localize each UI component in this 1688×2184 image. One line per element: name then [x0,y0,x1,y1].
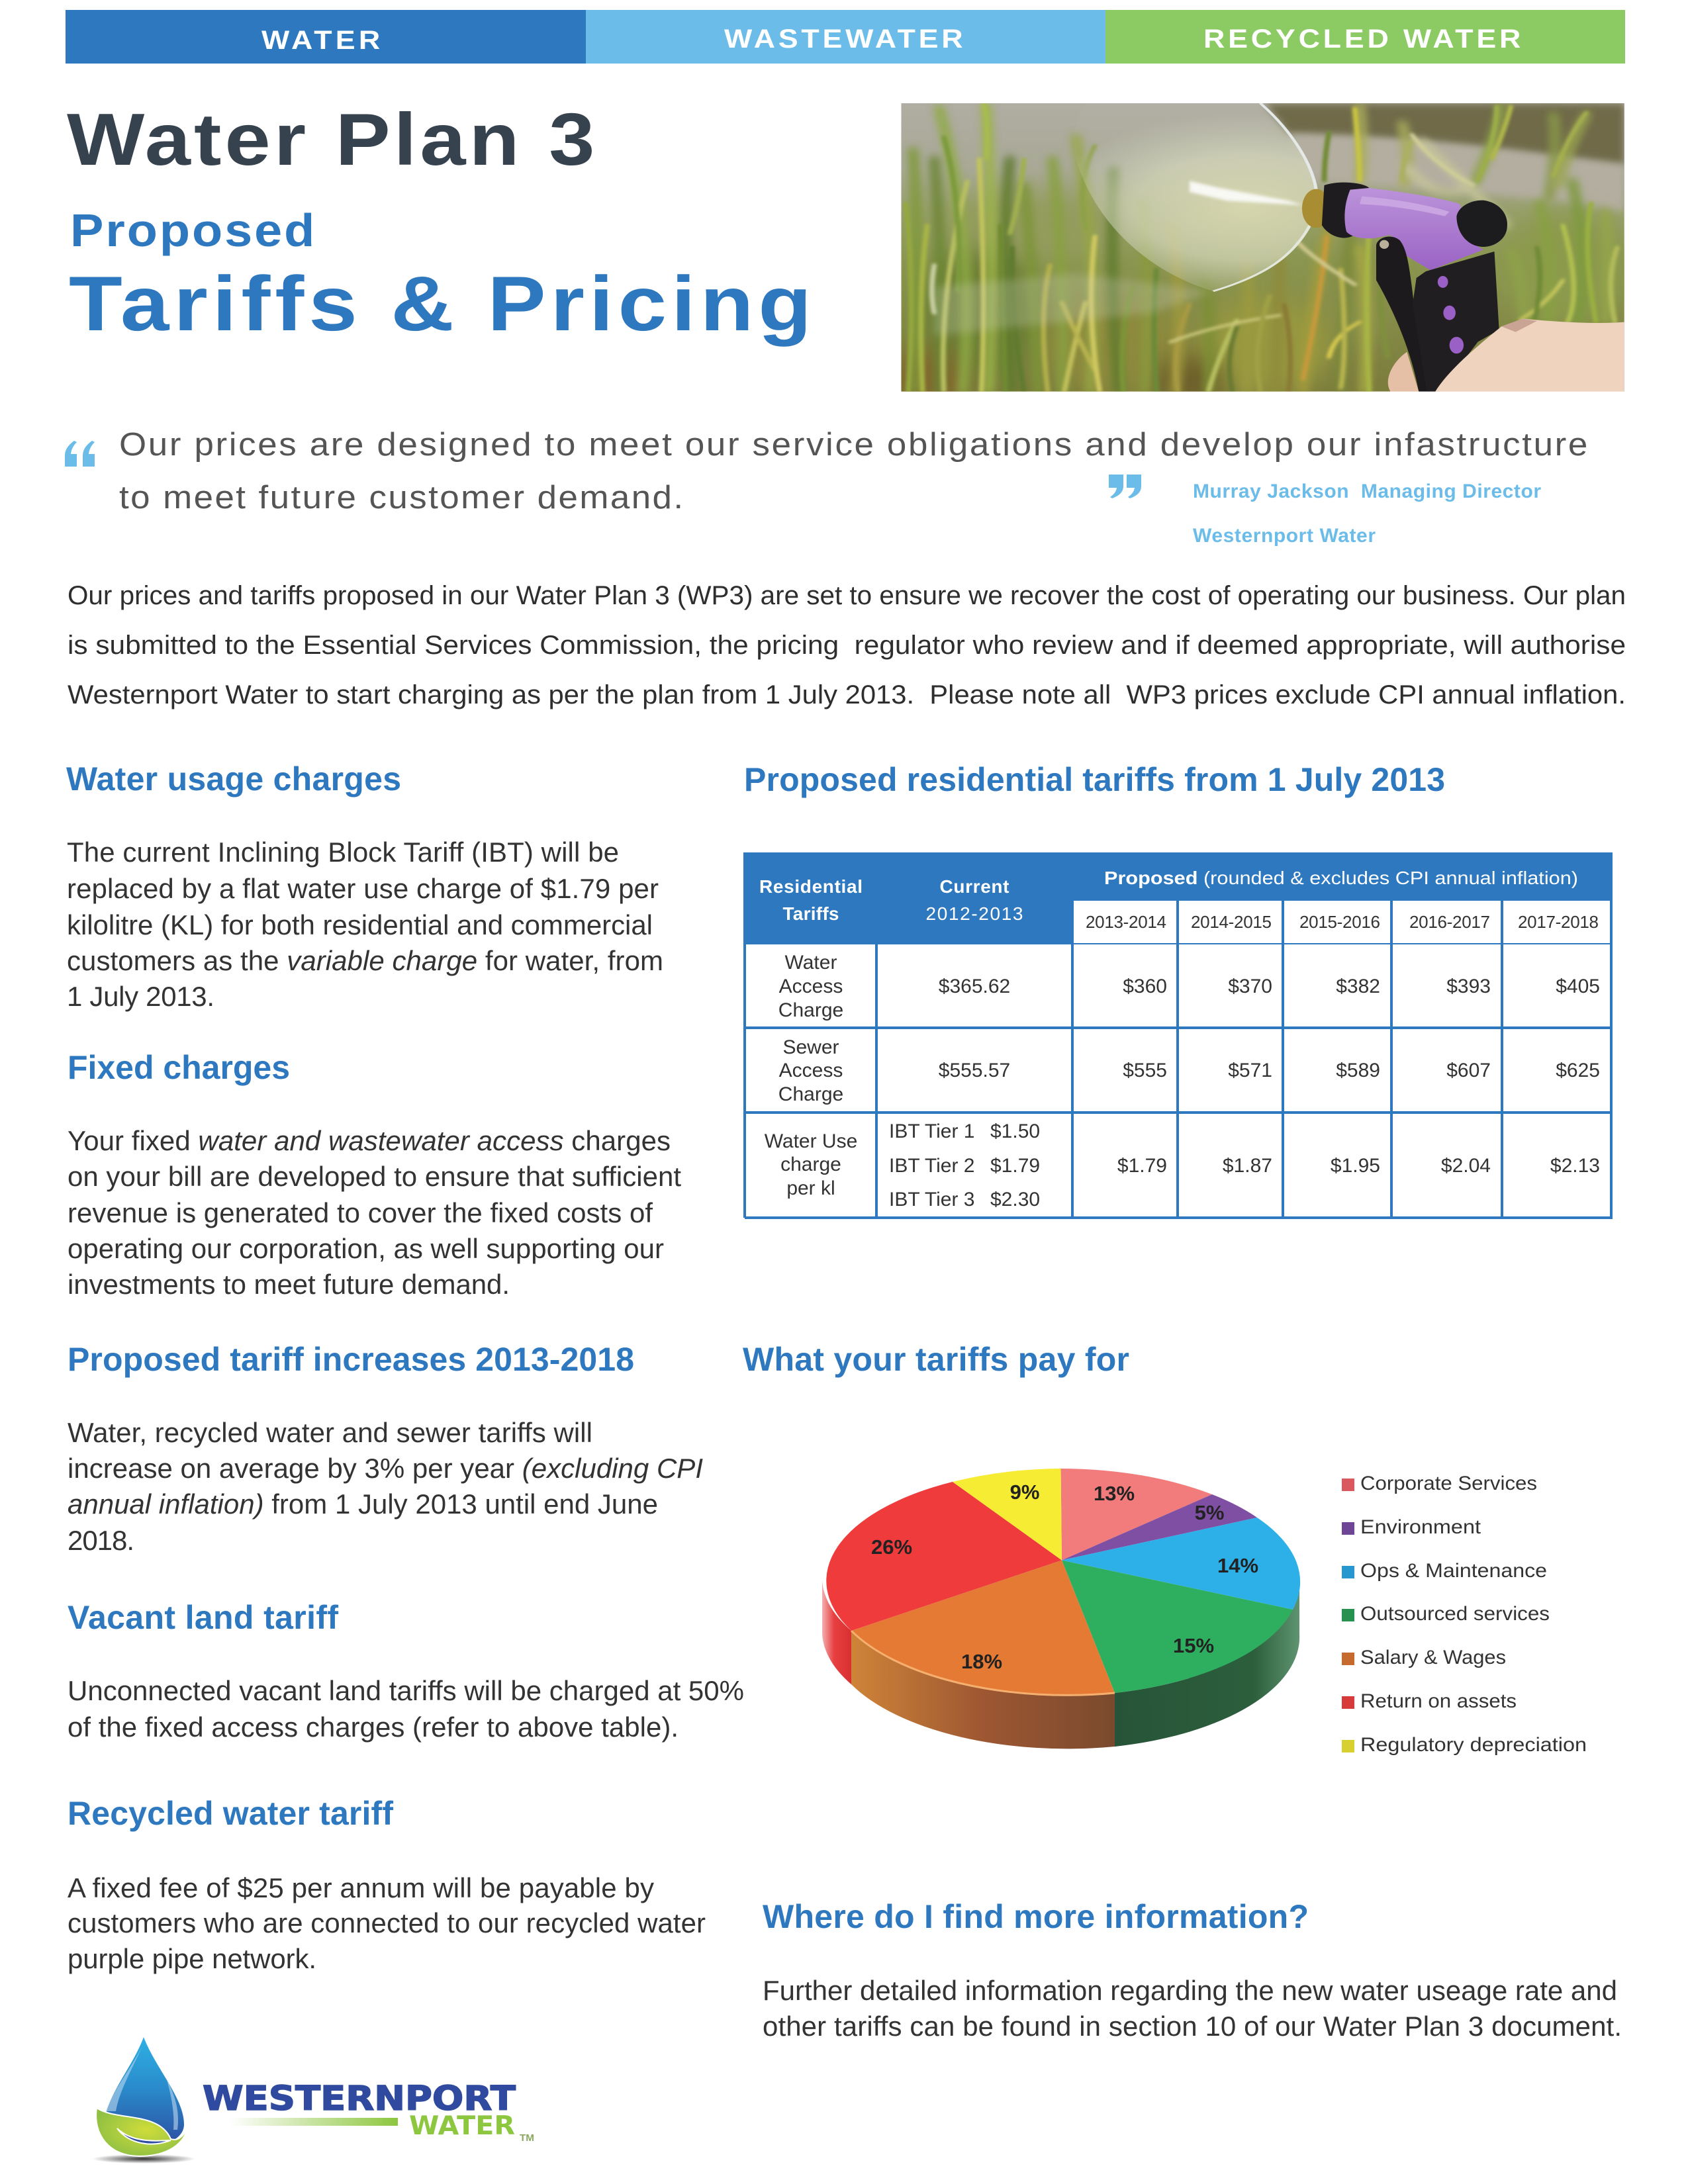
row: water access charge: Charge [778,999,843,1021]
body text: Water, recycled water and sewer tariffs will [68,1417,592,1448]
quote text: to meet future customer demand. [119,479,683,516]
row: water use charge: per kl [786,1177,835,1199]
heading: Vacant land tariff [68,1599,338,1636]
row: sewer access charge: Sewer [782,1036,839,1058]
row: water use charge [765,1120,1600,1210]
tab: recycled water [1105,10,1625,64]
body text [68,1675,744,1743]
slice: ops and maintenance 14% [1062,1518,1300,1610]
quote attribution: Murray Jackson Managing Director [1193,480,1541,502]
legend: environment: Environment [1360,1516,1481,1538]
hand [1435,319,1624,392]
body text: of the fixed access charges (refer to above table). [68,1711,679,1743]
row: water access charge: $370 [1228,976,1272,997]
slice: salary and wages 18%: 18% [961,1650,1002,1673]
row: sewer access charge: Access [779,1060,843,1081]
slice: regulatory depreciation 9% [953,1469,1062,1561]
body text: increase on average by 3% per year (excluding CPI [68,1453,703,1484]
row: sewer access charge: $625 [1556,1060,1600,1081]
intro paragraph [68,581,1626,709]
body text: operating our corporation, as well supporting our [68,1233,664,1264]
chart legend [1342,1473,1587,1756]
quote attribution [1193,480,1541,547]
nozzle [1301,189,1324,228]
row: water access charge: $365.62 [939,976,1010,997]
subtitle: tariffs and pricing: Tariffs & Pricing [69,261,812,347]
wordmark: westernport: WESTERNPORT [203,2079,516,2118]
water bell [1074,103,1316,291]
slice: outsourced services 15% [1062,1561,1293,1693]
slice: environment 5% [1062,1494,1257,1561]
photo: hose nozzle spraying water over grass [892,103,1624,410]
legend: outsourced services: Outsourced services [1360,1603,1550,1625]
pie chart [822,1469,1300,1749]
intro paragraph: Westernport Water to start charging as per the plan from 1 July 2013. Please note all WP3 prices exclude CPI annual inflation. [68,680,1626,709]
table header: 2015-2016 [1299,912,1380,932]
table header: Residential [759,876,863,897]
body text: on your bill are developed to ensure that sufficient [68,1161,681,1192]
table header: Current [940,876,1009,897]
subtitle: proposed: Proposed [70,205,314,256]
handle [1376,236,1430,392]
body text: other tariffs can be found in section 10 of our Water Plan 3 document. [763,2011,1622,2042]
section: vacant land tariff [68,1599,744,1743]
intro paragraph: Our prices and tariffs proposed in our Water Plan 3 (WP3) are set to ensure we recover the cost of operating our business. Our plan [68,581,1626,610]
pie side walls [822,1580,1299,1749]
quote text: Our prices are designed to meet our service obligations and develop our infastructure [119,426,1587,463]
table: residential tariffs [743,852,1613,1218]
tab: wastewater [586,10,1105,64]
tab: water: WATER [261,25,380,54]
tab: wastewater: WASTEWATER [724,24,963,53]
row: sewer access charge: $571 [1228,1060,1272,1081]
heading: Proposed tariff increases 2013-2018 [68,1341,634,1378]
row: water use charge: $1.50 [990,1120,1040,1142]
legend: corporate services: Corporate Services [1360,1473,1537,1494]
row: sewer access charge: $555 [1123,1060,1167,1081]
body text: replaced by a flat water use charge of $1.79 per [67,873,659,904]
row: water use charge: $2.30 [990,1189,1040,1210]
intro paragraph: is submitted to the Essential Services Commission, the pricing regulator who review and if deemed appropriate, will authorise [68,631,1626,660]
row: water use charge: IBT Tier 1 [889,1120,974,1142]
legend: salary and wages: Salary & Wages [1360,1647,1506,1668]
body text: purple pipe network. [68,1943,316,1974]
quote text [119,426,1587,516]
body text [67,837,663,1012]
row: water access charge [778,952,1600,1021]
heading: Water usage charges [66,760,401,797]
table header: Proposed (rounded & excludes CPI annual inflation) [1104,868,1578,888]
heading: Fixed charges [68,1049,290,1086]
body text: customers as the variable charge for water, from [67,945,663,976]
body text: kilolitre (KL) for both residential and commercial [67,909,653,940]
slice: outsourced services 15%: 15% [1173,1634,1214,1657]
slice: return on assets 26% [826,1482,1062,1631]
icon: opening quote mark [65,441,95,467]
body text: annual inflation) from 1 July 2013 until end June [68,1488,658,1520]
row: water use charge: $1.79 [1117,1155,1167,1177]
row: water access charge: Water [785,952,837,974]
row: water use charge: $2.04 [1441,1155,1491,1177]
heading: proposed residential tariffs: Proposed residential tariffs from 1 July 2013 [744,761,1445,798]
icon: water drop and leaf [92,2037,195,2163]
slice: ops and maintenance 14%: 14% [1217,1554,1258,1577]
table header: 2017-2018 [1518,912,1599,932]
body text: 1 July 2013. [67,981,214,1012]
heading: Recycled water tariff [68,1795,393,1832]
body text: A fixed fee of $25 per annum will be payable by [68,1872,654,1903]
slice: salary and wages 18% [851,1561,1115,1695]
section: recycled water tariff [68,1795,706,1974]
row: sewer access charge: $555.57 [939,1060,1010,1081]
row: water use charge: $1.79 [990,1155,1040,1177]
slice: corporate services 13% [1060,1469,1212,1561]
body text: customers who are connected to our recycled water [68,1907,706,1938]
table header [743,852,1613,944]
section: where do I find more information [763,1898,1622,2042]
row: water use charge: $1.95 [1331,1155,1380,1177]
row: water use charge: Water Use [765,1130,857,1152]
quote attribution: Westernport Water [1193,525,1376,547]
table header: 2016-2017 [1409,912,1490,932]
legend: ops and maintenance: Ops & Maintenance [1360,1560,1547,1582]
table header: 2014-2015 [1191,912,1272,932]
section: proposed tariff increases [68,1341,703,1556]
table header: 2012-2013 [925,903,1023,924]
body text: revenue is generated to cover the fixed costs of [68,1197,653,1228]
heading: Where do I find more information? [763,1898,1309,1935]
slice: environment 5%: 5% [1195,1501,1224,1524]
tab: water [66,10,586,64]
tab: recycled water: RECYCLED WATER [1203,24,1521,53]
body text [68,1417,703,1556]
row: sewer access charge: $607 [1446,1060,1491,1081]
body text [68,1872,706,1974]
row: water use charge: $1.87 [1223,1155,1272,1177]
body text: Further detailed information regarding the new water useage rate and [763,1975,1617,2006]
body text: investments to meet future demand. [68,1269,510,1300]
row: water use charge: $2.13 [1550,1155,1600,1177]
body text: 2018. [68,1525,134,1556]
trademark: TM [520,2132,534,2144]
slice: corporate services 13%: 13% [1094,1482,1135,1505]
row: water use charge: IBT Tier 3 [889,1189,974,1210]
row: sewer access charge: Charge [778,1083,843,1105]
table header: 2013-2014 [1086,912,1166,932]
wordmark: water: WATER [409,2111,515,2141]
title: Water Plan 3 [67,98,594,181]
row: water use charge: IBT Tier 2 [889,1155,974,1177]
slice: regulatory depreciation 9%: 9% [1010,1480,1039,1504]
section: fixed charges [68,1049,681,1300]
row: water access charge: Access [779,976,843,997]
slice: return on assets 26%: 26% [871,1535,912,1559]
section: water usage charges [66,760,663,1012]
table header: Tariffs [782,903,839,924]
body text: The current Inclining Block Tariff (IBT) will be [67,837,619,868]
row: sewer access charge [778,1036,1600,1105]
body text [763,1975,1622,2042]
heading: what your tariffs pay for: What your tariffs pay for [743,1341,1129,1378]
pull quote [65,426,1587,547]
row: water access charge: $360 [1123,976,1167,997]
logo green bar [230,2118,398,2126]
row: water access charge: $405 [1556,976,1600,997]
row: sewer access charge: $589 [1336,1060,1380,1081]
row: water use charge: charge [780,1154,841,1175]
row: water access charge: $393 [1446,976,1491,997]
body text: Your fixed water and wastewater access charges [68,1125,671,1156]
logo: westernport water [92,2037,534,2163]
legend: regulatory depreciation: Regulatory depreciation [1360,1734,1587,1756]
icon: closing quote mark [1109,475,1141,498]
header tab bar [66,10,1625,64]
body text [68,1125,681,1300]
body text: Unconnected vacant land tariffs will be charged at 50% [68,1675,744,1706]
legend: return on assets: Return on assets [1360,1690,1517,1712]
row: water access charge: $382 [1336,976,1380,997]
